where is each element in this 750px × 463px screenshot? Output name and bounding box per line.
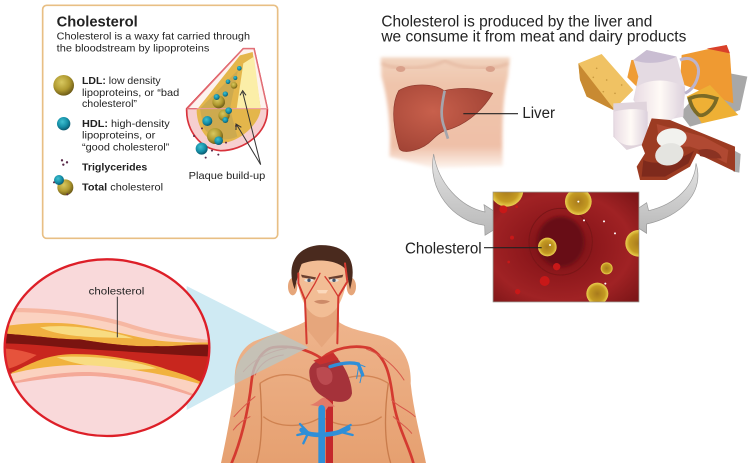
magnifier beam xyxy=(187,286,308,410)
panel intro text: Cholesterol is a waxy fat carried through xyxy=(57,31,250,42)
liver ligament xyxy=(442,91,448,139)
icon: triglycerides dots xyxy=(61,159,68,166)
lower plaque xyxy=(12,354,200,384)
gouda slice xyxy=(687,85,738,123)
panel intro text: the bloodstream by lipoproteins xyxy=(57,43,209,54)
heading: liver and diet: Cholesterol is produced by the liver and xyxy=(381,13,652,30)
body xyxy=(221,322,426,463)
HDL text: lipoproteins, or xyxy=(82,131,156,142)
glass of milk xyxy=(613,102,648,150)
total cholesterol label: Total cholesterol xyxy=(82,183,163,194)
bloodstream image xyxy=(405,173,652,305)
HDL text xyxy=(82,119,171,153)
lens leader line xyxy=(116,297,119,337)
heart xyxy=(309,357,352,402)
panel heading: Cholesterol xyxy=(57,14,138,30)
neck xyxy=(305,303,339,347)
meat xyxy=(637,118,735,180)
LDL text: lipoproteins, or “bad xyxy=(82,88,180,99)
lumen xyxy=(0,333,213,383)
plaque arrows xyxy=(236,91,261,165)
arteries xyxy=(232,263,415,463)
milk jug xyxy=(633,50,685,123)
lower artery wall xyxy=(10,365,199,394)
heading: liver and diet xyxy=(380,13,687,46)
food illustration xyxy=(578,45,747,180)
panel: cholesterol key xyxy=(43,5,278,238)
highlighted shoulder xyxy=(235,333,308,384)
face xyxy=(301,275,343,280)
cholesterol label: Cholesterol xyxy=(405,240,482,257)
icon: HDL sphere xyxy=(57,117,70,130)
head xyxy=(297,260,347,317)
orange cheese xyxy=(680,45,733,103)
icon: LDL sphere xyxy=(53,75,74,96)
triglycerides label: Triglycerides xyxy=(82,162,148,173)
torso xyxy=(381,57,510,168)
icon: total cholesterol xyxy=(53,175,73,195)
torso and liver illustration xyxy=(381,57,555,168)
man figure xyxy=(221,245,426,463)
red blood cells xyxy=(499,205,560,294)
HDL text: HDL: high-density xyxy=(82,119,171,130)
eggs xyxy=(656,127,687,150)
upper plaque xyxy=(7,322,208,346)
LDL text: cholesterol” xyxy=(82,99,138,110)
plaque label: Plaque build-up xyxy=(189,171,266,182)
panel intro text xyxy=(57,31,250,54)
lens label: cholesterol xyxy=(89,286,144,297)
cholesterol bubbles xyxy=(493,192,639,302)
arrow: food to bloodstream xyxy=(623,163,698,233)
shadow xyxy=(680,73,747,127)
liver xyxy=(394,85,493,151)
upper artery wall xyxy=(14,308,208,342)
magnified artery lens xyxy=(0,259,213,440)
cholesterol leader line xyxy=(484,246,542,249)
LDL text xyxy=(82,76,180,110)
plaque artery cross-section xyxy=(187,49,267,159)
LDL text: LDL: low density xyxy=(82,76,162,87)
arrow: liver to bloodstream xyxy=(433,154,509,235)
liver label: Liver xyxy=(522,105,555,122)
vena cava and veins xyxy=(297,363,365,463)
hair xyxy=(291,245,353,289)
lens background below artery xyxy=(14,376,192,435)
heading: liver and diet: we consume it from meat and dairy products xyxy=(380,29,687,46)
HDL text: “good cholesterol” xyxy=(82,142,170,153)
liver leader line xyxy=(463,112,518,115)
yellow cheese wedge xyxy=(578,54,633,110)
